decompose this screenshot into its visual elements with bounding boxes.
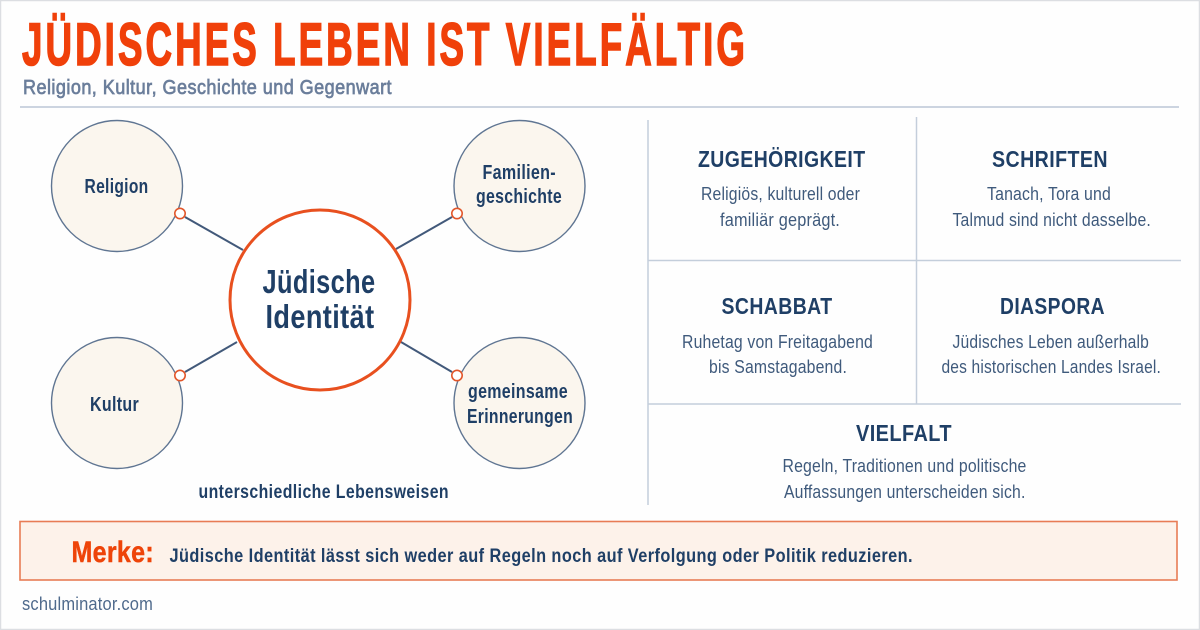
cell: Zugehörigkeit (698, 146, 866, 230)
header (20, 11, 1179, 107)
cell: Schriften (952, 146, 1151, 230)
cell: Vielfalt: Regeln, Traditionen und politische (782, 456, 1026, 476)
cell: Vielfalt (782, 420, 1026, 502)
cell: Schabbat: bis Samstagabend. (709, 357, 847, 377)
panel: identity diagram (52, 120, 585, 503)
cell: Diaspora: DIASPORA (1000, 293, 1105, 319)
node: gemeinsame Erinnerungen: gemeinsame (468, 381, 568, 403)
panel: terms grid (648, 117, 1181, 505)
node: Familiengeschichte (454, 120, 585, 252)
cell: Vielfalt: Auffassungen unterscheiden sich. (784, 482, 1026, 502)
callout: Merke: Jüdische Identität lässt sich weder auf Regeln noch auf Verfolgung oder Politik reduzieren. (170, 546, 913, 567)
subtitle: Religion, Kultur, Geschichte und Gegenwart (23, 77, 392, 99)
node: Religion (52, 120, 182, 252)
node: gemeinsame Erinnerungen (454, 338, 585, 468)
cell: Diaspora: des historischen Landes Israel. (942, 357, 1161, 377)
cell: Zugehörigkeit: familiär geprägt. (720, 210, 840, 230)
center node: Jüdische Identität (230, 210, 410, 390)
connector dots (175, 208, 462, 381)
node: Familiengeschichte: geschichte (476, 186, 562, 208)
caption: unterschiedliche Lebensweisen (198, 482, 449, 503)
cell: Diaspora (942, 293, 1161, 377)
cell: Diaspora: Jüdisches Leben außerhalb (952, 332, 1149, 352)
node: Kultur (52, 338, 182, 468)
cell: Schabbat: SCHABBAT (722, 293, 832, 319)
cell: Schriften: Talmud sind nicht dasselbe. (952, 210, 1151, 230)
connector: Familiengeschichte (396, 217, 452, 249)
cell: Schabbat: Ruhetag von Freitagabend (682, 332, 873, 352)
cell: Zugehörigkeit: Religiös, kulturell oder (701, 184, 860, 204)
callout: Merke: Merke: (72, 536, 154, 569)
connector: Kultur (185, 342, 237, 372)
connector: Religion (185, 217, 243, 250)
cell: Schabbat (682, 293, 873, 377)
cell: Zugehörigkeit: ZUGEHÖRIGKEIT (698, 146, 866, 172)
center node: Jüdische Identität: Identität (266, 298, 374, 335)
cell: Schriften: Tanach, Tora und (987, 184, 1111, 204)
node: Religion: Religion (84, 176, 148, 198)
node: Kultur: Kultur (90, 394, 139, 416)
callout: Merke (20, 522, 1177, 580)
connector: gemeinsame Erinnerungen (401, 342, 452, 372)
cell: Schriften: SCHRIFTEN (992, 146, 1108, 172)
center node: Jüdische Identität: Jüdische (262, 263, 376, 300)
cell: Vielfalt: VIELFALT (856, 420, 952, 446)
node: Familiengeschichte: Familien- (482, 162, 556, 184)
title: JÜDISCHES LEBEN IST VIELFÄLTIG (22, 11, 748, 78)
footer source: schulminator.com (22, 594, 153, 614)
node: gemeinsame Erinnerungen: Erinnerungen (467, 406, 573, 428)
